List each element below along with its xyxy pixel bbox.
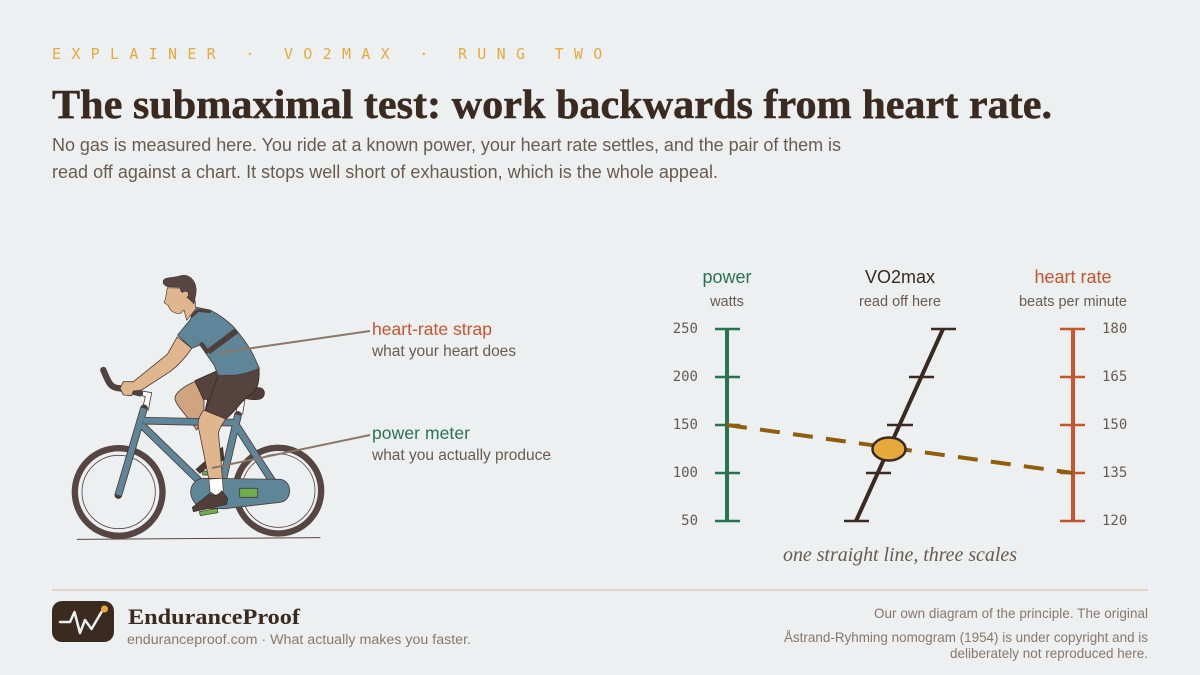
power scale: 250 [673,321,698,337]
brand tagline: enduranceproof.com · What actually makes you faster. [127,632,471,648]
near pedal [199,508,218,516]
callout: heart-rate strap [371,319,516,360]
leader line: power meter [212,435,370,468]
callout: heart-rate strap: heart-rate strap [372,319,492,339]
dashed reading line [727,425,1073,473]
intro text: No gas is measured here. You ride at a known power, your heart rate settles, and the pair of them is [52,135,841,155]
saddle [245,387,264,400]
intro text: read off against a chart. It stops well short of exhaustion, which is the whole appeal. [52,162,718,182]
chart caption: one straight line, three scales [783,544,1017,566]
shirt [178,307,259,376]
title: The submaximal test: work backwards from heart rate. [52,81,1052,127]
copyright note: Åstrand-Ryhming nomogram (1954) is under copyright and is [784,630,1148,645]
power scale: power [702,267,752,287]
rear wheel [235,448,321,533]
head and neck [164,288,196,320]
far pedal [203,471,208,475]
sock [209,478,223,496]
power scale: watts [709,294,744,310]
power meter [240,488,258,497]
arm [120,337,192,396]
copyright note: Our own diagram of the principle. The original [874,606,1148,621]
bike frame [118,408,272,495]
seat post [236,392,246,414]
callout: power meter: power meter [372,423,470,443]
VO2max scale: VO2max [865,267,935,287]
callout: power meter: what you actually produce [371,447,551,464]
heart rate scale: 180 [1102,321,1127,337]
reading marker [872,438,906,460]
power scale: 150 [673,417,698,433]
cyclist illustration [75,275,321,539]
handlebar [103,370,140,393]
hair [163,275,196,304]
ground line [77,538,320,539]
heart rate scale [1019,267,1127,529]
kicker: EXPLAINER · VO2MAX · RUNG TWO [52,45,613,63]
front wheel [75,448,162,536]
power scale: 50 [681,513,698,529]
power scale: 200 [673,369,698,385]
heart rate scale: 150 [1102,417,1127,433]
power scale: 100 [673,465,698,481]
bike frame fill [118,408,272,495]
copyright note: deliberately not reproduced here. [950,646,1148,661]
brand name: EnduranceProof [128,604,301,629]
far shoe [196,447,224,473]
VO2max scale: read off here [859,294,941,310]
chain guard [191,478,290,509]
power scale [673,267,752,529]
copyright note [784,606,1148,661]
callout: heart-rate strap: what your heart does [371,343,516,360]
callout: power meter [371,423,551,464]
logo [52,601,114,642]
VO2max scale [844,267,956,521]
stem [140,391,152,410]
heart-rate strap [191,310,237,353]
leader line: heart-rate strap [218,331,370,353]
nomogram chart [673,267,1127,566]
near shoe [192,491,228,512]
intro text [52,135,841,182]
heart rate scale: beats per minute [1019,294,1127,310]
heart rate scale: 165 [1102,369,1127,385]
far thigh [175,382,204,430]
heart rate scale: heart rate [1034,267,1112,287]
heart rate scale: 135 [1102,465,1127,481]
near leg [198,410,226,480]
heart rate scale: 120 [1102,513,1127,529]
shorts [195,368,259,419]
